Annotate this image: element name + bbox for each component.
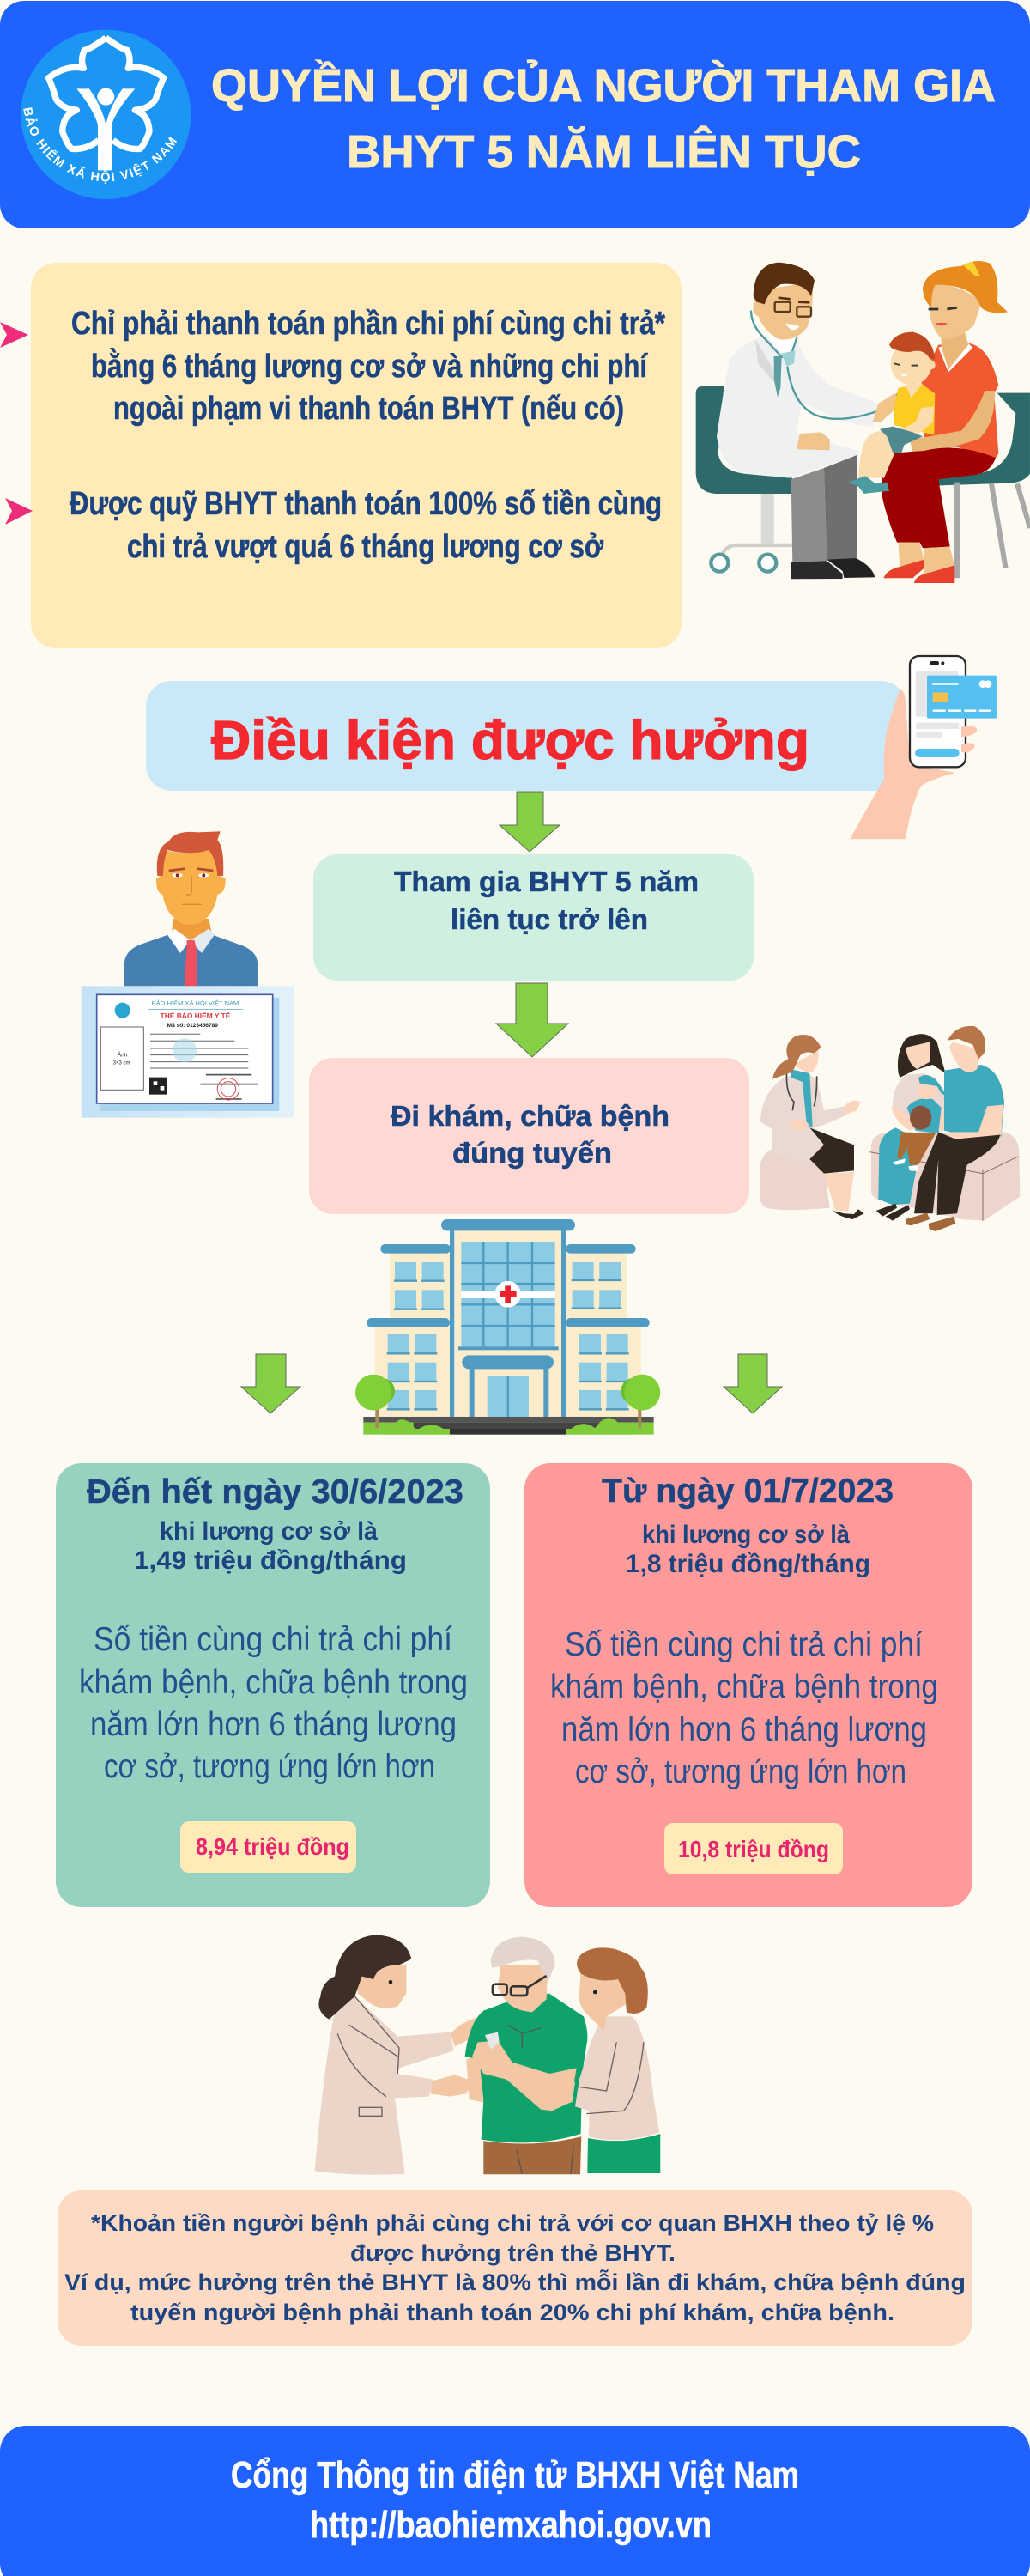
condition 2 text: Đi khám, chữa bệnh: [391, 1100, 670, 1132]
footer text: Cổng Thông tin điện tử BHXH Việt Nam: [231, 2454, 799, 2496]
card subheading: 1,49 triệu đồng/tháng: [134, 1546, 407, 1575]
card body: khám bệnh, chữa bệnh trong: [79, 1664, 468, 1701]
card body: [550, 1626, 938, 1790]
condition 2 text: đúng tuyến: [452, 1137, 612, 1169]
footer text: [231, 2454, 799, 2546]
arrow: to left card: [241, 1354, 300, 1413]
heading text: Điều kiện được hưởng: [211, 709, 809, 771]
condition 1 text: Tham gia BHYT 5 năm: [394, 866, 699, 897]
illustration: doctor examining child: [696, 261, 1030, 583]
illustration: man with insurance card: 3×3 cm: [113, 1060, 130, 1066]
illustration: man with insurance card: [82, 831, 294, 1118]
condition 1 text: [394, 866, 699, 935]
header banner: [0, 1, 1030, 228]
benefit 1 text: ngoài phạm vi thanh toán BHYT (nếu có): [113, 391, 624, 427]
card heading: Đến hết ngày 30/6/2023: [87, 1473, 464, 1510]
card body: năm lớn hơn 6 tháng lương: [561, 1711, 927, 1748]
benefit 2 text: [70, 486, 662, 565]
footnote text: tuyến người bệnh phải thanh toán 20% chi phí khám, chữa bệnh.: [130, 2300, 894, 2325]
illustration: man with insurance card: Mã số: 0123456789: [167, 1023, 219, 1029]
title: BHYT 5 NĂM LIÊN TỤC: [347, 125, 861, 178]
illustration: doctor consulting family: [760, 1026, 1020, 1231]
amount pill: [180, 1821, 356, 1873]
panel: condition 2: [309, 1058, 749, 1214]
card subheading: khi lương cơ sở là: [642, 1521, 850, 1549]
panel: until 30/6/2023: [56, 1463, 490, 1907]
card body: năm lớn hơn 6 tháng lương: [90, 1706, 457, 1743]
illustration: man with insurance card: BẢO HIỂM XÃ HỘI VIỆT NAM: [152, 999, 239, 1007]
condition 2 text: [391, 1100, 670, 1169]
panel: footnote: [58, 2190, 972, 2346]
card heading: Từ ngày 01/7/2023: [602, 1473, 894, 1510]
panel: conditions heading: [146, 681, 906, 791]
card subheading: khi lương cơ sở là: [160, 1517, 378, 1546]
illustration: man with insurance card: THẺ BẢO HIỂM Y TẾ: [161, 1011, 231, 1020]
benefit 1 text: bằng 6 tháng lương cơ sở và những chi phí: [91, 347, 648, 385]
benefit 1 text: [71, 306, 665, 427]
condition 1 text: liên tục trở lên: [451, 903, 648, 935]
card body: [79, 1621, 468, 1785]
footnote text: *Khoản tiền người bệnh phải cùng chi trả với cơ quan BHXH theo tỷ lệ %: [91, 2210, 934, 2236]
panel: from 01/7/2023: [524, 1463, 972, 1907]
footer text: http://baohiemxahoi.gov.vn: [310, 2504, 712, 2546]
card body: cơ sở, tương ứng lớn hơn: [104, 1748, 435, 1785]
footnote text: được hưởng trên thẻ BHYT.: [350, 2240, 676, 2266]
panel: condition 1: [313, 854, 754, 981]
card subheading: [626, 1521, 870, 1578]
arrow: heading to condition 1: [500, 792, 560, 852]
arrow: bullet 2: [5, 498, 33, 525]
arrow: bullet 1: [0, 322, 28, 348]
card subheading: [134, 1517, 407, 1575]
card body: Số tiền cùng chi trả chi phí: [94, 1621, 452, 1658]
card body: khám bệnh, chữa bệnh trong: [550, 1668, 938, 1705]
title: [211, 60, 996, 178]
benefit 2 text: Được quỹ BHYT thanh toán 100% số tiền cùng: [70, 486, 662, 522]
illustration: hand with phone and card: [850, 656, 997, 839]
amount pill: [664, 1823, 843, 1874]
logo: Bảo hiểm xã hội Việt Nam: [21, 29, 191, 199]
illustration: man with insurance card: Ảnh: [118, 1051, 128, 1059]
illustration: doctor with elderly patient: [315, 1935, 660, 2175]
panel: benefits: [31, 263, 682, 648]
arrow: to right card: [724, 1354, 782, 1413]
card body: Số tiền cùng chi trả chi phí: [565, 1626, 923, 1663]
illustration: hospital building: [355, 1219, 660, 1435]
arrow: condition 1 to condition 2: [496, 983, 568, 1057]
title: QUYỀN LỢI CỦA NGƯỜI THAM GIA: [211, 60, 996, 112]
benefit 1 text: Chỉ phải thanh toán phần chi phí cùng chi trả*: [71, 306, 665, 342]
card subheading: 1,8 triệu đồng/tháng: [626, 1550, 870, 1578]
card body: cơ sở, tương ứng lớn hơn: [575, 1753, 906, 1790]
amount pill: 10,8 triệu đồng: [678, 1836, 829, 1862]
footnote text: [64, 2210, 966, 2325]
amount pill: 8,94 triệu đồng: [196, 1833, 349, 1860]
benefit 2 text: chi trả vượt quá 6 tháng lương cơ sở: [127, 529, 604, 565]
logo: Bảo hiểm xã hội Việt Nam: BẢO HIỂM XÃ HỘI VIỆT NAM: [23, 107, 177, 184]
footer banner: [0, 2426, 1030, 2576]
footnote text: Ví dụ, mức hưởng trên thẻ BHYT là 80% thì mỗi lần đi khám, chữa bệnh đúng: [64, 2269, 966, 2295]
